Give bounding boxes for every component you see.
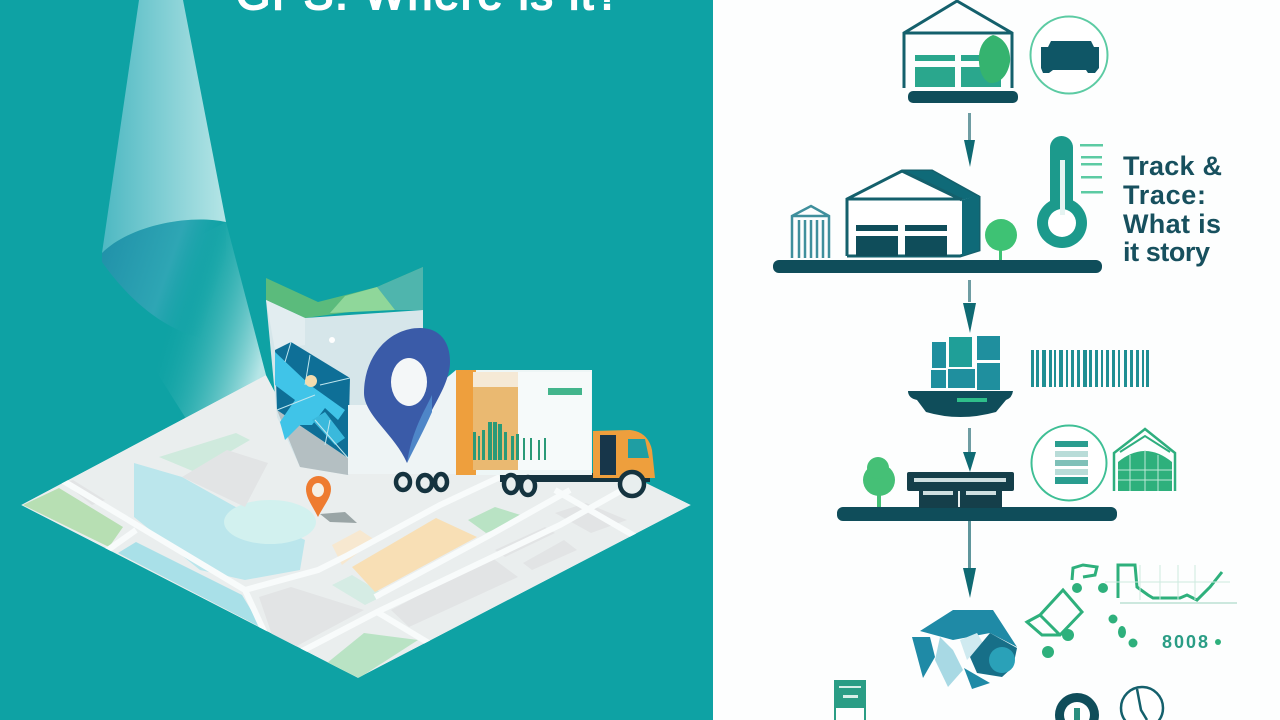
heading: track and trace (1123, 151, 1222, 267)
heading: track and trace: Track & (1123, 151, 1222, 181)
icon: blue mosaic on map (275, 337, 350, 458)
arrow: depot to globe (963, 521, 976, 598)
truck wheels (396, 472, 644, 496)
icon: crumpled globe (912, 610, 1017, 689)
truck box (456, 370, 592, 475)
icon: circle with sofa (1030, 16, 1108, 94)
truck chassis (500, 473, 650, 482)
card: white card behind pin (348, 370, 456, 474)
icon: warehouse one (904, 1, 1018, 103)
map: green park blocks (23, 433, 527, 678)
map: orange blocks (332, 518, 477, 592)
panel: teal GPS panel background (0, 0, 713, 720)
heading: track and trace: it story (1123, 237, 1210, 267)
arrow: ship to depot (963, 428, 976, 472)
icon: thermometer (1037, 136, 1103, 248)
chart: line graph (1118, 565, 1222, 600)
chart: network outlines (1027, 565, 1097, 635)
icon: folded paper map (266, 267, 423, 475)
icon: dark circle badge (1055, 693, 1099, 720)
chart: green network and line graph (1027, 565, 1237, 658)
icon: small tree (985, 219, 1017, 260)
icon: container ship (908, 336, 1013, 417)
heading: track and trace: Trace: (1123, 180, 1206, 210)
label: chart number: 8008 (1162, 632, 1208, 652)
icon: circle with server stack (1032, 426, 1106, 500)
icon: outlined clock (1121, 687, 1163, 720)
chart: network nodes (1042, 583, 1221, 658)
panel: white track and trace background (713, 0, 1280, 720)
icon: large tree (863, 457, 895, 507)
map: isometric city map (21, 375, 691, 678)
arrow: warehouse one to warehouse two (964, 113, 975, 167)
icon: green greenhouse (1114, 429, 1175, 491)
icon: small orange map pin (306, 476, 357, 523)
icon: barcode (1031, 350, 1149, 387)
map: roads (50, 473, 650, 660)
map: water areas (118, 463, 316, 628)
map: building blocks (64, 450, 627, 647)
arrow: warehouse two to ship (963, 280, 976, 333)
icon: delivery truck (396, 370, 655, 496)
truck cab (593, 430, 655, 478)
truck bar chart (473, 422, 546, 460)
icon: silo (792, 206, 829, 258)
icon: location beam of light (102, 0, 266, 425)
icon: warehouse two with silo (773, 171, 1102, 273)
icon: small green sign (834, 680, 866, 720)
icon: depot building on platform (837, 472, 1117, 521)
heading: track and trace: What is (1123, 209, 1221, 239)
icon: large blue location pin (364, 328, 450, 463)
